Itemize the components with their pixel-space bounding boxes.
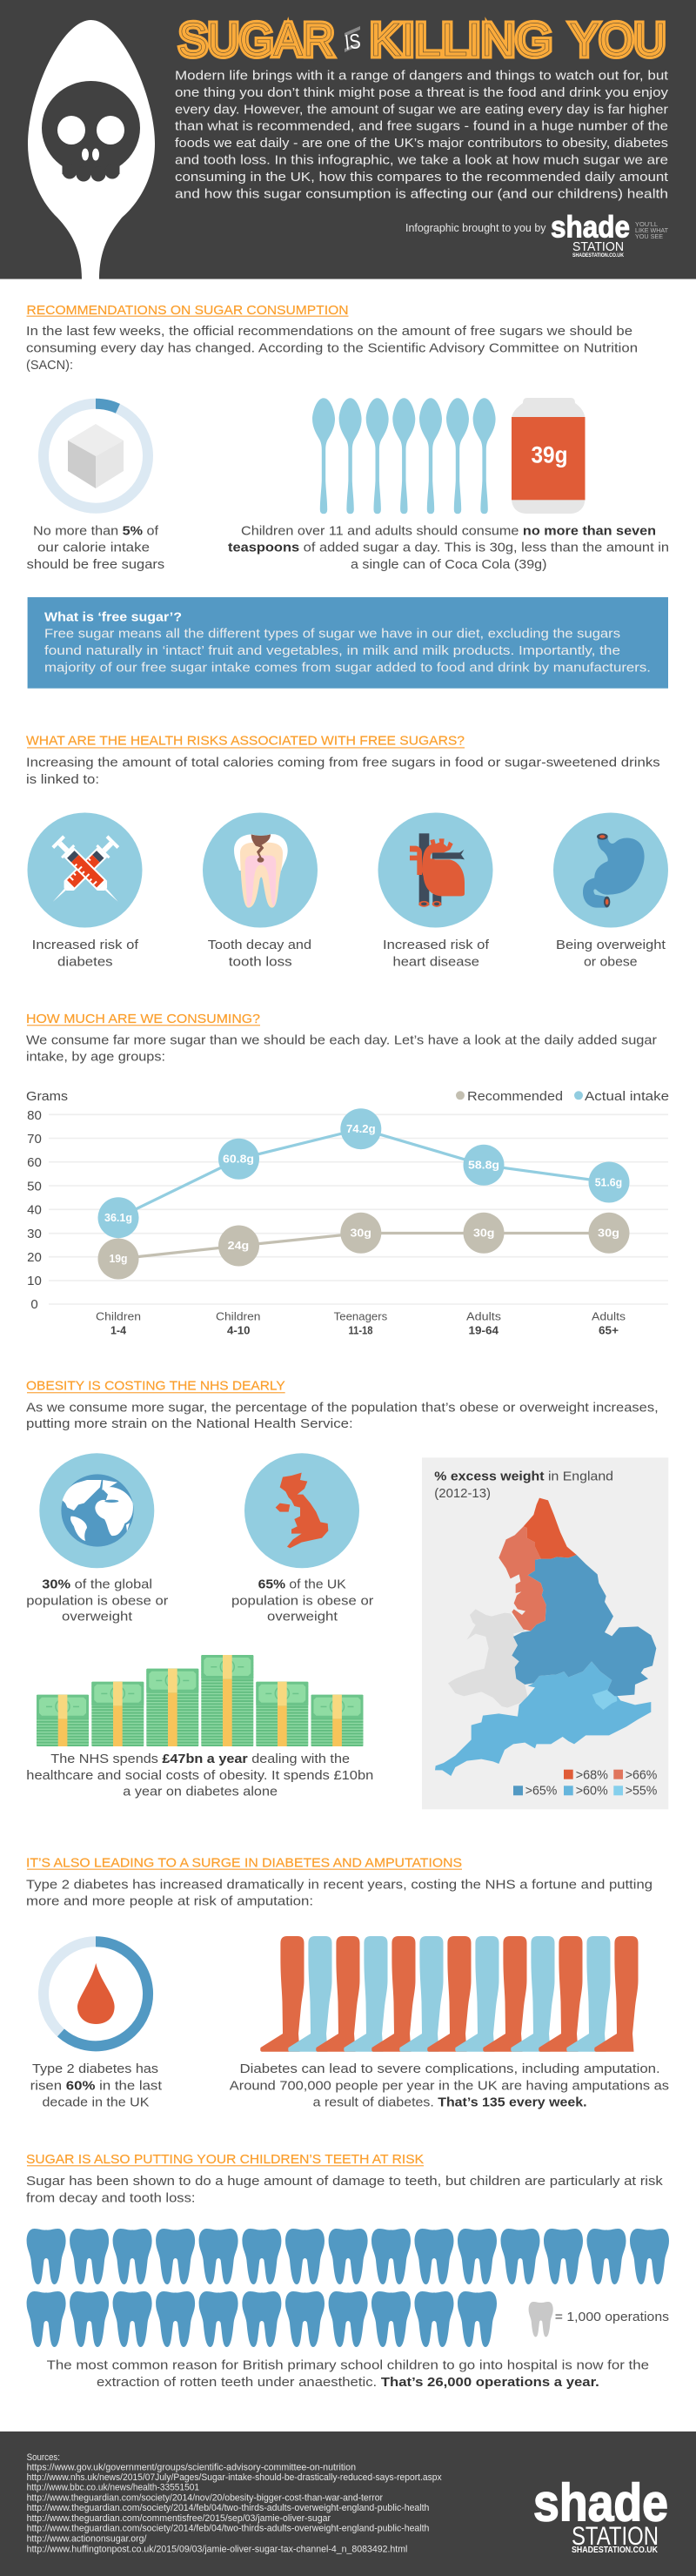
y axis: 0 bbox=[30, 1297, 38, 1312]
caption: seven teaspoons bbox=[228, 523, 669, 572]
caption: diabetes rise: decade in the UK bbox=[42, 2095, 149, 2110]
title: YOU bbox=[569, 14, 666, 66]
series: actual intake bbox=[97, 1108, 630, 1238]
x axis: Children bbox=[216, 1310, 261, 1323]
icon: globe bbox=[39, 1453, 154, 1568]
series: recommended: 30g bbox=[350, 1226, 371, 1240]
caption: NHS spending: healthcare and social costs of obesity. It spends £10bn bbox=[26, 1768, 373, 1783]
sources: http://www.theguardian.com/society/2014/feb/04/two-thirds-adults-overweight-england-public-health bbox=[27, 2503, 429, 2513]
caption: seven teaspoons: a single can of Coca Cola (39g) bbox=[351, 557, 546, 572]
intro paragraph: intake, by age groups: bbox=[26, 1050, 165, 1065]
choropleth map bbox=[435, 1498, 656, 1776]
title: IS bbox=[344, 30, 362, 55]
logo: shade station: STATION bbox=[572, 2522, 659, 2551]
intro paragraph: (SACN): bbox=[26, 358, 73, 373]
sources: http://www.huffingtonpost.co.uk/2015/09/03/jamie-oliver-sugar-tax-channel-4_n_8083492.html bbox=[27, 2544, 407, 2554]
x axis: 19-64 bbox=[468, 1324, 499, 1337]
series: actual intake: 51.6g bbox=[595, 1175, 622, 1189]
caption: overweight bbox=[556, 938, 666, 969]
panel: obesity bbox=[26, 1379, 668, 1809]
caption: UK obesity bbox=[231, 1577, 373, 1624]
heading: consumption: HOW MUCH ARE WE CONSUMING? bbox=[26, 1012, 260, 1026]
y axis: 20 bbox=[27, 1250, 42, 1265]
caption: heart disease: Increased risk of bbox=[383, 938, 490, 952]
sources: http://www.bbc.co.uk/news/health-33551501 bbox=[27, 2483, 199, 2493]
sources: Sources: bbox=[27, 2452, 60, 2463]
title: SUGAR bbox=[178, 14, 334, 66]
y axis: 80 bbox=[27, 1108, 42, 1123]
caption: diabetes bbox=[32, 938, 139, 969]
series: recommended: 24g bbox=[228, 1239, 249, 1252]
sources: http://www.theguardian.com/society/2014/nov/20/obesity-bigger-cost-than-war-and-terror bbox=[27, 2492, 383, 2503]
y axis: 50 bbox=[27, 1179, 42, 1194]
series: recommended: 30g bbox=[598, 1226, 619, 1240]
x axis: 1-4 bbox=[110, 1324, 127, 1337]
intro text: and tooth loss. In this infographic, we take a look at how much sugar we are bbox=[175, 153, 668, 167]
caption: NHS spending bbox=[26, 1752, 373, 1799]
panel: diabetes and amputations bbox=[26, 1855, 669, 2110]
x axis: 11-18 bbox=[348, 1324, 372, 1337]
map legend: >68% bbox=[576, 1767, 608, 1782]
panel: children's teeth bbox=[26, 2152, 669, 2390]
sponsor credit: shade bbox=[551, 211, 630, 244]
caption: tooth decay: tooth loss bbox=[229, 954, 292, 969]
caption: global obesity bbox=[26, 1577, 168, 1624]
sponsor credit: YOU SEE bbox=[635, 232, 663, 240]
caption: global obesity: overweight bbox=[62, 1610, 133, 1624]
sponsor credit: LIKE WHAT bbox=[635, 226, 668, 234]
sources: http://www.nhs.uk/news/2015/07July/Pages/Sugar-intake-should-be-drastically-reduced-says-report.aspx bbox=[27, 2472, 442, 2483]
caption: tooth decay bbox=[208, 938, 311, 969]
caption: overweight: or obese bbox=[584, 954, 638, 969]
sources: http://www.theguardian.com/society/2014/feb/04/two-thirds-adults-overweight-england-public-health bbox=[27, 2524, 429, 2534]
logo: shade station: shade bbox=[533, 2474, 668, 2532]
icon: heart bbox=[378, 813, 492, 928]
callout: what is free sugar: majority of our free sugar intake comes from sugar added to food and drink by manufacturers. bbox=[44, 660, 651, 675]
icon: row of legs bbox=[260, 1936, 639, 2052]
intro paragraph bbox=[26, 1400, 659, 1431]
sponsor credit: YOU’LL bbox=[635, 220, 658, 228]
header panel bbox=[0, 0, 696, 279]
title bbox=[178, 14, 666, 66]
x axis: Children bbox=[96, 1310, 141, 1323]
y axis bbox=[26, 1089, 68, 1312]
intro paragraph: consuming every day has changed. According to the Scientific Advisory Committee on Nutrition bbox=[26, 341, 638, 356]
legend bbox=[456, 1089, 669, 1104]
legend: Recommended bbox=[467, 1089, 563, 1104]
intro text: foods we eat daily - are one of the UK’s major contributors to obesity, diabetes bbox=[175, 136, 668, 151]
icon: can of cola bbox=[512, 398, 585, 514]
caption: global obesity: population is obese or bbox=[26, 1593, 168, 1608]
sponsor credit: STATION bbox=[572, 239, 624, 254]
icon: UK map bbox=[244, 1453, 359, 1568]
intro paragraph bbox=[26, 1877, 652, 1909]
intro text bbox=[175, 68, 669, 201]
caption: diabetes rise: risen 60% in the last bbox=[30, 2078, 163, 2093]
title: KILLING bbox=[370, 14, 552, 66]
caption: heart disease: heart disease bbox=[393, 954, 479, 969]
intro paragraph: Type 2 diabetes has increased dramatically in recent years, costing the NHS a fortune and putting bbox=[26, 1877, 652, 1892]
sponsor credit: SHADESTATION.CO.UK bbox=[572, 253, 625, 259]
caption: heart disease bbox=[383, 938, 490, 969]
heading: health risks: WHAT ARE THE HEALTH RISKS ASSOCIATED WITH FREE SUGARS? bbox=[26, 734, 465, 749]
pictogram: teeth bbox=[27, 2229, 669, 2347]
sponsor credit bbox=[405, 211, 668, 259]
intro paragraph: In the last few weeks, the official recommendations on the amount of free sugars we should be bbox=[26, 324, 632, 339]
intro text: one thing you don’t think might pose a threat is the food and drink you enjoy bbox=[175, 85, 669, 100]
intro paragraph: putting more strain on the National Health Service: bbox=[26, 1416, 353, 1431]
caption: amputations bbox=[230, 2061, 669, 2110]
series: actual intake: 36.1g bbox=[104, 1211, 132, 1224]
series: recommended bbox=[97, 1213, 630, 1280]
sources bbox=[27, 2452, 442, 2554]
intro text: than what is recommended, and free sugars - found in a huge number of the bbox=[175, 119, 668, 134]
icon: stomach bbox=[553, 813, 668, 928]
heading: teeth: SUGAR IS ALSO PUTTING YOUR CHILDREN’S TEETH AT RISK bbox=[26, 2152, 424, 2167]
caption: global obesity: 30% of the global bbox=[42, 1577, 152, 1591]
intro paragraph bbox=[26, 324, 638, 373]
icon: blood drop ring bbox=[44, 1941, 148, 2046]
x axis: 65+ bbox=[599, 1324, 619, 1337]
intro paragraph bbox=[26, 1032, 657, 1065]
heading: diabetes: IT’S ALSO LEADING TO A SURGE IN DIABETES AND AMPUTATIONS bbox=[26, 1855, 462, 1870]
caption: 5% of calories: should be free sugars bbox=[27, 557, 164, 572]
caption: NHS spending: a year on diabetes alone bbox=[123, 1785, 278, 1799]
map legend bbox=[513, 1767, 657, 1799]
sources: https://www.gov.uk/government/groups/scientific-advisory-committee-on-nutrition bbox=[27, 2462, 356, 2472]
y axis: Grams bbox=[26, 1089, 68, 1104]
caption: operations bbox=[47, 2358, 649, 2390]
logo: shade station: SHADESTATION.CO.UK bbox=[572, 2546, 659, 2555]
sources: http://www.theguardian.com/commentisfree/2015/sep/03/jamie-oliver-sugar bbox=[27, 2513, 331, 2524]
callout: what is free sugar: Free sugar means all the different types of sugar we have in our diet, excluding the sugars bbox=[44, 627, 620, 642]
caption: overweight: Being overweight bbox=[556, 938, 666, 952]
line chart: sugar intake by age group bbox=[26, 1089, 669, 1337]
x axis: Teenagers bbox=[334, 1310, 388, 1323]
icon: sugar cube ring bbox=[44, 404, 148, 508]
key: one tooth equals 1,000 operations bbox=[529, 2302, 669, 2337]
intro paragraph: is linked to: bbox=[26, 772, 99, 787]
caption: seven teaspoons: teaspoons of added sugar a day. This is 30g, less than the amount in bbox=[228, 541, 669, 555]
y axis: 70 bbox=[27, 1132, 42, 1147]
title: YOU bbox=[569, 14, 666, 66]
intro paragraph bbox=[26, 756, 660, 787]
caption: 5% of calories: No more than 5% of bbox=[33, 523, 159, 538]
y axis: 10 bbox=[27, 1274, 42, 1288]
intro text: Modern life brings with it a range of dangers and things to watch out for, but bbox=[175, 68, 669, 84]
caption: UK obesity: population is obese or bbox=[231, 1593, 373, 1608]
map legend: >65% bbox=[525, 1784, 557, 1799]
sponsor credit: Infographic brought to you by bbox=[405, 221, 546, 234]
intro paragraph: Sugar has been shown to do a huge amount of damage to teeth, but children are particularly at risk bbox=[26, 2174, 663, 2189]
x axis: 4-10 bbox=[227, 1324, 251, 1337]
title: KILLING bbox=[370, 14, 552, 66]
caption: 5% of calories bbox=[27, 523, 164, 572]
series: actual intake: 74.2g bbox=[346, 1122, 376, 1135]
caption: diabetes rise bbox=[30, 2061, 163, 2110]
intro paragraph: As we consume more sugar, the percentage of the population that’s obese or overweight increases, bbox=[26, 1400, 659, 1416]
caption: UK obesity: 65% of the UK bbox=[258, 1577, 346, 1591]
map legend: >60% bbox=[576, 1784, 608, 1799]
series: actual intake: 60.8g bbox=[223, 1153, 254, 1165]
map legend: >66% bbox=[626, 1767, 657, 1782]
map legend: >55% bbox=[626, 1784, 657, 1799]
caption: diabetes: diabetes bbox=[57, 954, 113, 969]
map panel: excess weight in England bbox=[422, 1457, 668, 1809]
intro paragraph: more and more people at risk of amputation: bbox=[26, 1894, 313, 1909]
caption: 5% of calories: our calorie intake bbox=[37, 541, 150, 555]
intro text: every day. However, the amount of sugar we are eating every day is far higher bbox=[175, 102, 668, 117]
x axis: Adults bbox=[466, 1310, 502, 1323]
icon: can of cola: 39g bbox=[531, 442, 567, 468]
y axis: 40 bbox=[27, 1203, 42, 1217]
key: one tooth equals 1,000 operations: = 1,000 operations bbox=[555, 2310, 669, 2324]
intro text: consuming in the UK, how this compares to the recommended daily amount bbox=[175, 170, 669, 185]
caption: diabetes: Increased risk of bbox=[32, 938, 139, 952]
icon: seven teaspoons bbox=[312, 398, 496, 514]
series: recommended: 30g bbox=[473, 1226, 495, 1240]
title: SUGAR bbox=[178, 14, 334, 66]
caption: amputations: Around 700,000 people per year in the UK are having amputations as bbox=[230, 2078, 669, 2093]
callout: what is free sugar bbox=[28, 597, 668, 689]
caption: operations: The most common reason for British primary school children to go into hospital is now for the bbox=[47, 2358, 649, 2373]
intro paragraph bbox=[26, 2174, 663, 2205]
caption: tooth decay: Tooth decay and bbox=[208, 938, 311, 952]
callout: what is free sugar: What is ‘free sugar’? bbox=[44, 609, 182, 624]
icon: decayed tooth bbox=[203, 813, 318, 928]
x axis: Adults bbox=[592, 1310, 626, 1323]
heading: obesity: OBESITY IS COSTING THE NHS DEARLY bbox=[26, 1379, 285, 1394]
caption: amputations: Diabetes can lead to severe complications, including amputation. bbox=[240, 2061, 660, 2076]
caption: NHS spending: The NHS spends £47bn a year dealing with the bbox=[50, 1752, 350, 1766]
panel: health risks bbox=[26, 734, 668, 969]
caption: UK obesity: overweight bbox=[267, 1610, 338, 1624]
caption: amputations: a result of diabetes. That’s 135 every week. bbox=[313, 2095, 586, 2110]
intro paragraph: from decay and tooth loss: bbox=[26, 2190, 195, 2205]
x axis bbox=[96, 1310, 626, 1337]
icon: spoon with skull bbox=[28, 20, 155, 279]
y axis: 60 bbox=[27, 1155, 42, 1170]
intro text: and how this sugar consumption is affecting our (and our childrens) health bbox=[175, 186, 668, 201]
series: actual intake: 58.8g bbox=[468, 1158, 499, 1172]
icon: crossed syringes bbox=[28, 813, 143, 928]
caption: operations: extraction of rotten teeth under anaesthetic. That’s 26,000 operations a year. bbox=[97, 2375, 599, 2390]
map title: % excess weight in England bbox=[434, 1470, 613, 1484]
intro paragraph: We consume far more sugar than we should be each day. Let’s have a look at the daily added sugar bbox=[26, 1032, 657, 1047]
series: recommended: 19g bbox=[110, 1252, 128, 1265]
logo: shade station bbox=[533, 2474, 668, 2555]
legend: Actual intake bbox=[585, 1089, 669, 1104]
map title: (2012-13) bbox=[434, 1486, 491, 1501]
callout: what is free sugar: found naturally in ‘intact’ fruit and vegetables, in milk and milk products. Importantly, the bbox=[44, 643, 620, 658]
map title bbox=[434, 1470, 613, 1501]
heading: recommendations: RECOMMENDATIONS ON SUGAR CONSUMPTION bbox=[26, 303, 348, 318]
footer panel bbox=[0, 2431, 696, 2576]
icon: stacks of money bbox=[37, 1655, 364, 1746]
panel: consumption bbox=[26, 1012, 669, 1337]
caption: seven teaspoons: Children over 11 and adults should consume no more than seven bbox=[241, 523, 656, 538]
sources: http://www.actiononsugar.org/ bbox=[27, 2533, 147, 2544]
y axis: 30 bbox=[27, 1227, 42, 1241]
intro paragraph: Increasing the amount of total calories coming from free sugars in food or sugar-sweetened drinks bbox=[26, 756, 660, 770]
panel: recommendations bbox=[26, 303, 669, 689]
caption: diabetes rise: Type 2 diabetes has bbox=[32, 2061, 158, 2076]
